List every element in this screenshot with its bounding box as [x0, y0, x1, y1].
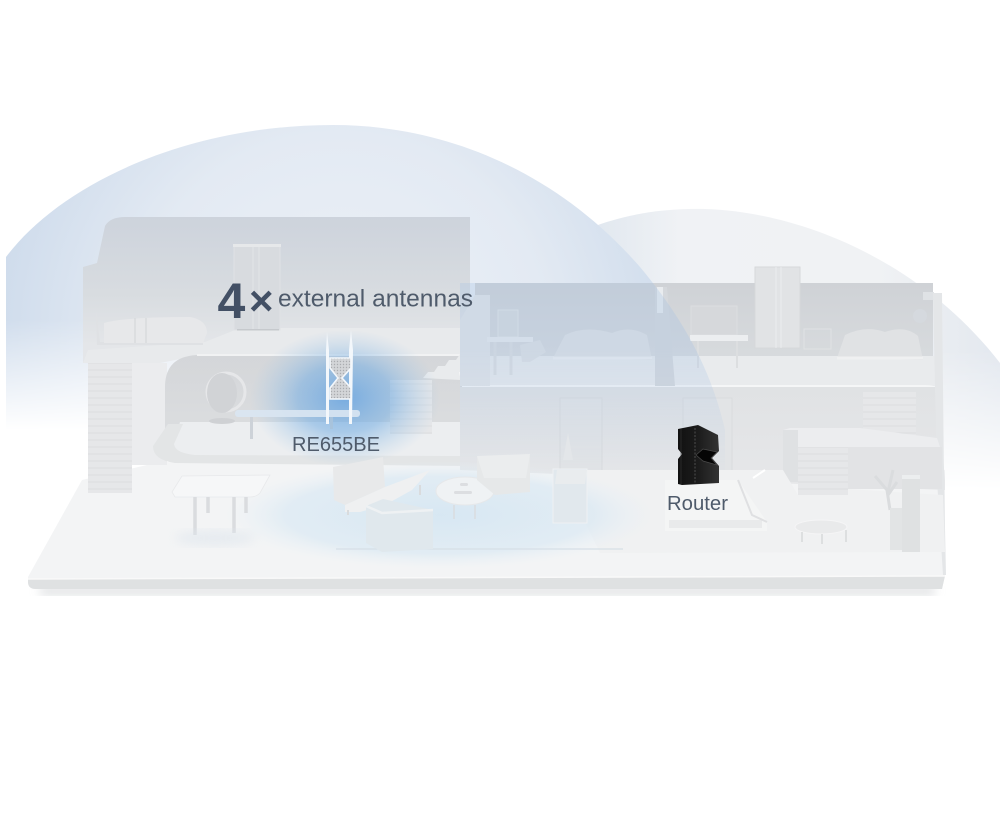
upper left room [83, 217, 470, 365]
back wall [83, 217, 470, 363]
wall shelf [923, 292, 934, 300]
desk right [690, 335, 748, 368]
armchair back [477, 454, 530, 495]
drawer stack [390, 380, 432, 434]
door two [683, 398, 732, 471]
steps [423, 354, 460, 380]
round side table [795, 520, 847, 544]
label: 4x external antennas: external antennas [278, 286, 473, 312]
large blue glow around extender [250, 330, 440, 466]
left extender coverage dome [6, 125, 652, 410]
label: Router: Router [667, 493, 728, 515]
label: 4x external antennas: × [249, 277, 274, 324]
wardrobe right [755, 267, 800, 348]
dining table [172, 475, 270, 535]
tv [691, 306, 737, 335]
label: 4x external antennas [218, 273, 473, 329]
left partition [460, 295, 490, 386]
wall lamp [913, 309, 927, 323]
round coffee table [436, 477, 494, 519]
door one [560, 398, 602, 471]
label: RE655BE: RE655BE [292, 434, 380, 456]
right router coverage dome [598, 209, 1000, 448]
upper left floor [83, 328, 470, 365]
upper right floor [460, 356, 937, 386]
sofa [333, 457, 430, 515]
desk left [487, 310, 546, 375]
stepped storage [783, 392, 942, 495]
antennas [326, 332, 329, 424]
bed [96, 310, 207, 345]
bed two [837, 329, 923, 360]
body [330, 358, 351, 399]
vacuum stand [553, 433, 587, 523]
right wall edge [933, 293, 946, 575]
router icon [678, 425, 719, 485]
blue floor glow [225, 461, 655, 569]
house floor plate [28, 462, 945, 589]
blue tint where extender coverage overlaps the right block [460, 283, 722, 422]
armchair front [366, 499, 433, 552]
striped pillar under upper room [88, 363, 132, 493]
label: 4x external antennas: 4 [218, 273, 246, 329]
extender device [326, 330, 353, 424]
side chest [804, 329, 831, 349]
wardrobe [233, 244, 281, 330]
upper right block [460, 267, 938, 390]
pillar side wall [132, 363, 167, 465]
platform [173, 422, 462, 456]
floor under right room [460, 470, 945, 553]
lower right wall [460, 387, 945, 490]
bed one [553, 329, 652, 360]
plant and tall shelf [875, 470, 920, 552]
lower left room with curved wall [153, 354, 462, 466]
rug outline [336, 548, 623, 550]
hoop chair [207, 373, 245, 424]
low coffee table [235, 410, 360, 439]
infographic scene [6, 125, 1000, 596]
rug and bed base [665, 470, 767, 531]
tall window pillar [655, 287, 675, 386]
floor shadow [40, 587, 935, 595]
